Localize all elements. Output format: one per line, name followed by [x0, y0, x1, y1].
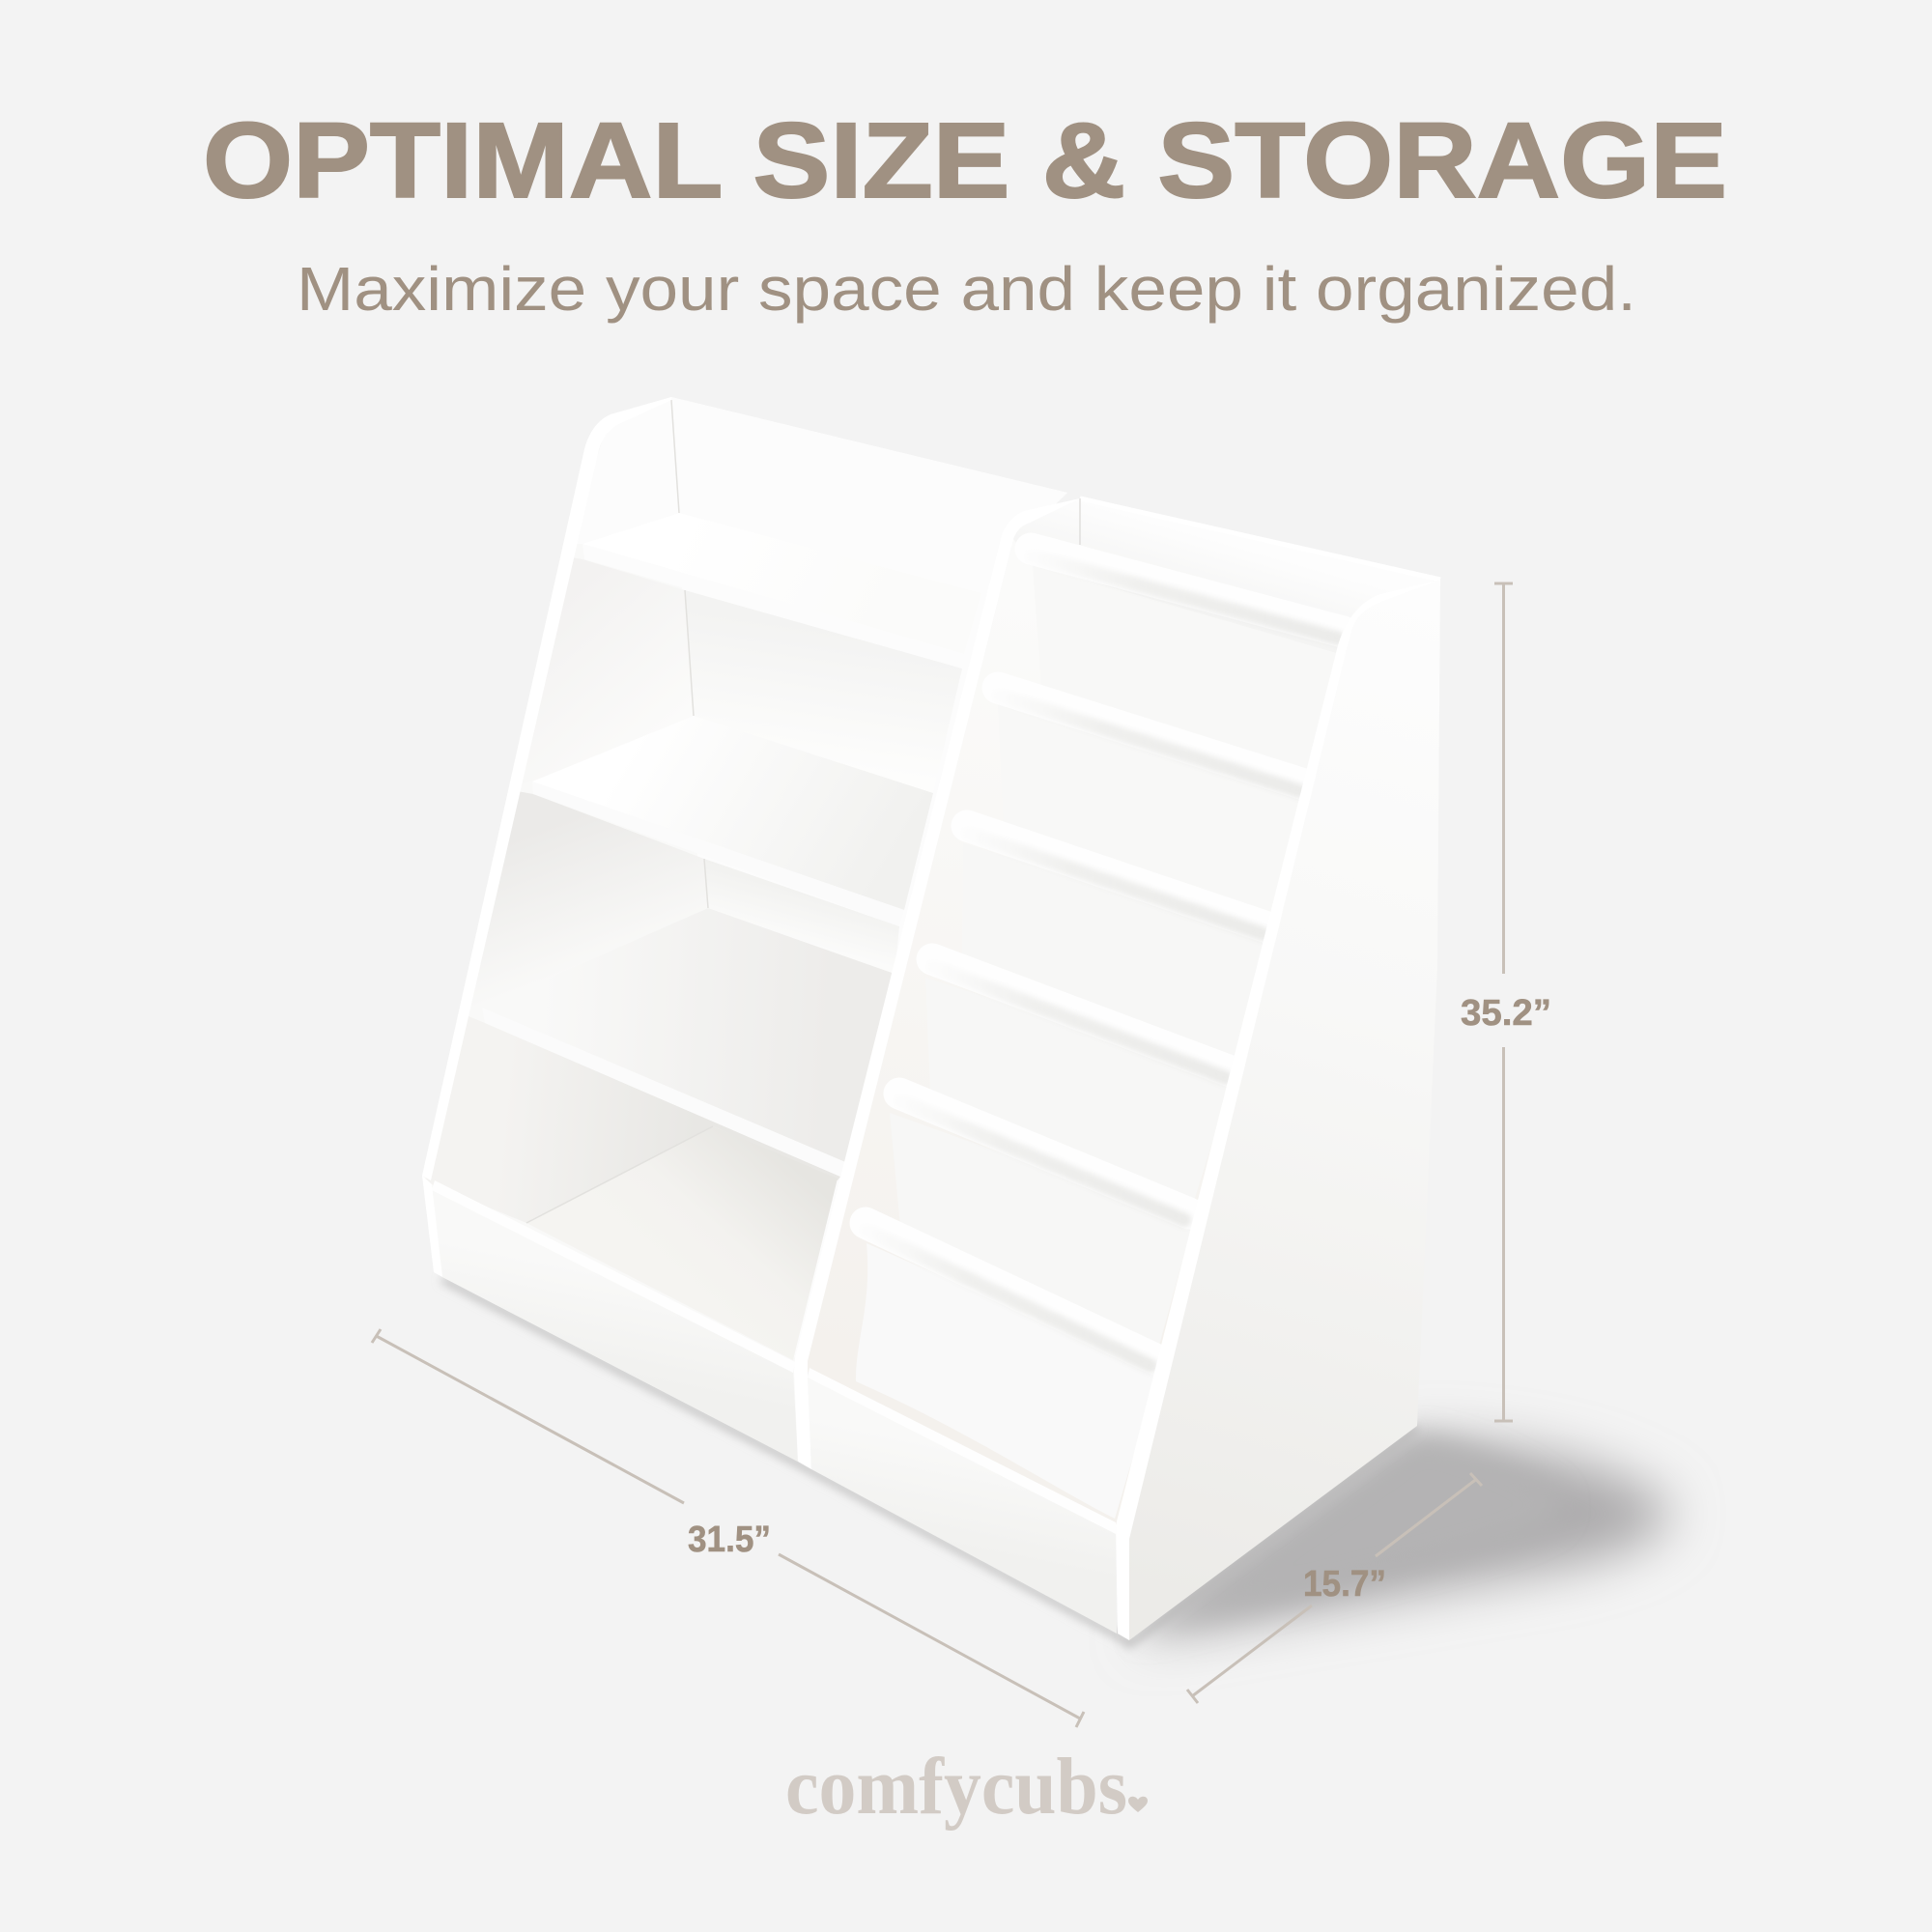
width label: 31.5” [688, 1520, 771, 1560]
rod 3 [967, 826, 1267, 934]
height line [1494, 583, 1513, 1421]
right unit back wall [1013, 498, 1437, 653]
icon: heart [1128, 1797, 1148, 1812]
subtitle: Maximize your space and keep it organized. [297, 254, 1636, 324]
sling fabric 1 [1033, 565, 1336, 784]
top shelf [582, 513, 981, 668]
rod 4 [932, 959, 1231, 1078]
rod 2 [998, 688, 1304, 791]
height label: 35.2” [1461, 993, 1551, 1034]
left unit back wall [671, 397, 1067, 1358]
sling rods [866, 549, 1343, 1366]
right base top lip [808, 1368, 1116, 1534]
brand name: comfycubs [785, 1742, 1127, 1832]
left inner wall bottom bay [425, 1014, 840, 1223]
left inner wall top [570, 400, 679, 544]
width dimension: 31.5 in [372, 1329, 1084, 1727]
depth line [1187, 1473, 1482, 1703]
shadow core [1135, 1435, 1561, 1637]
right side outer face [1129, 580, 1440, 1640]
back wall top edge [1080, 498, 1440, 580]
sling fabric 4 [925, 978, 1233, 1213]
brand logo [785, 1742, 1148, 1832]
middle shelf [532, 716, 933, 926]
right side panel front edge [1116, 580, 1440, 1640]
left unit backing [422, 397, 1067, 1462]
back wall below first shelf [685, 590, 962, 793]
rod 1 [1031, 549, 1343, 639]
left unit: shelving [422, 397, 1067, 1462]
corner seams [526, 400, 713, 1223]
rod 5 [899, 1094, 1189, 1220]
depth label: 15.7” [1303, 1564, 1386, 1605]
title: OPTIMAL SIZE & STORAGE [203, 101, 1727, 220]
rod 6 [866, 1223, 1155, 1366]
contact shadow under base [442, 1279, 1417, 1644]
back corner seam [1079, 498, 1081, 545]
left inner wall first bay [512, 555, 694, 787]
back wall below second shelf [704, 859, 899, 974]
left side panel front edge [422, 397, 671, 1277]
right unit: canvas book slings [794, 498, 1440, 1640]
width line [372, 1329, 1084, 1727]
floor shadow [1132, 1439, 1670, 1642]
right unit base board [808, 1378, 1117, 1634]
height dimension: 35.2 in [1461, 583, 1551, 1421]
sling fabric 6 [856, 1243, 1158, 1519]
bottom compartment floor [526, 1126, 838, 1360]
left inner wall second bay [464, 790, 708, 1009]
bookshelf product [372, 397, 1551, 1832]
divider panel front edge [794, 498, 1080, 1469]
base top lip [432, 1180, 795, 1373]
sling fabric 5 [890, 1113, 1193, 1359]
right unit interior [808, 539, 1336, 1528]
sling fabric 3 [962, 843, 1269, 1071]
depth dimension: 15.7 in [1187, 1473, 1482, 1703]
sling fabric 2 [998, 703, 1306, 927]
left unit base board [432, 1186, 798, 1462]
lower shelf [482, 908, 895, 1177]
